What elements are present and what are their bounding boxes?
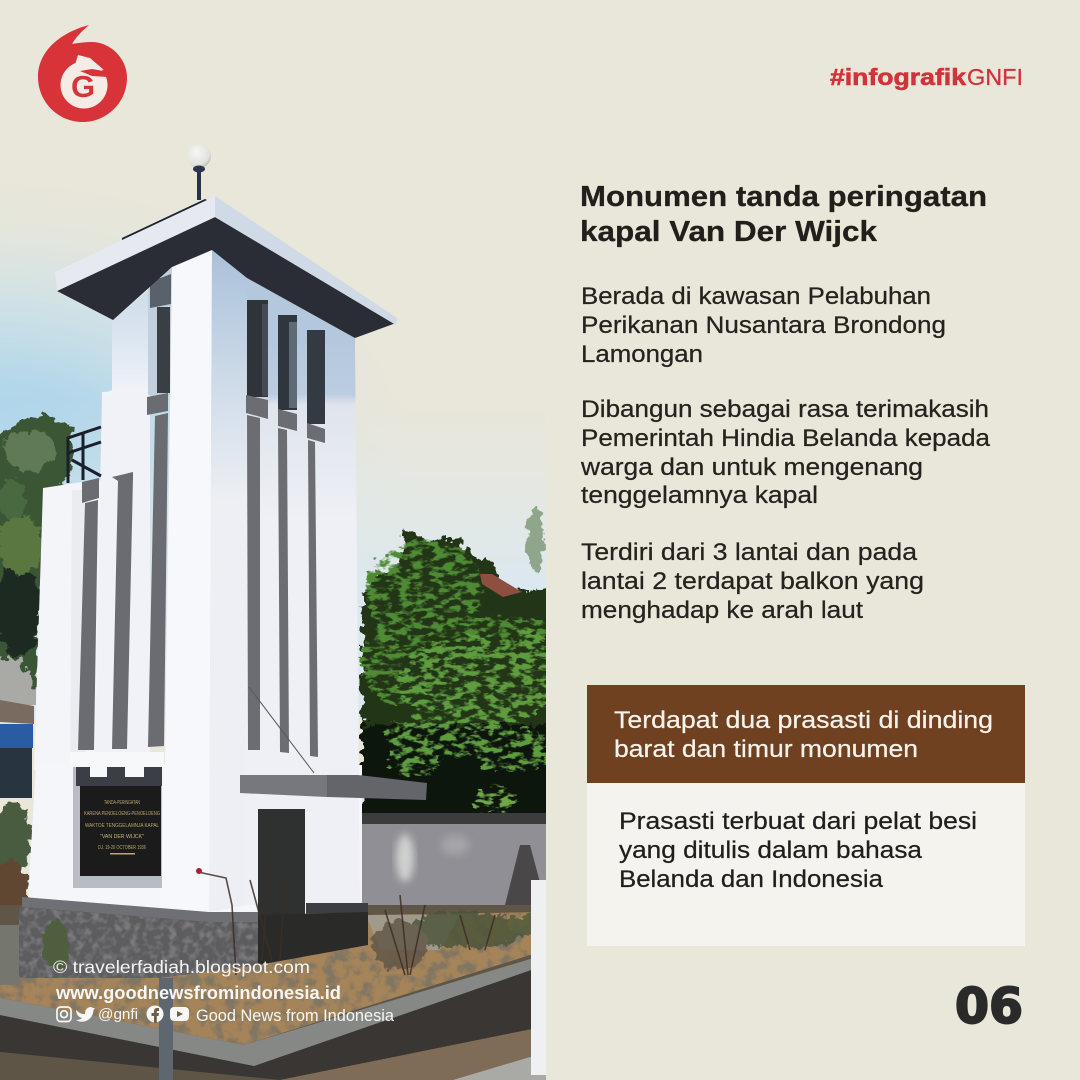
window left face (150, 274, 171, 308)
dry bushes (372, 912, 543, 969)
photo: monument tower (0, 144, 590, 1080)
heading: kapal Van Der Wijck (580, 216, 878, 248)
heading (580, 181, 987, 248)
text block: purpose: tenggelamnya kapal (581, 482, 818, 509)
sky (0, 241, 546, 720)
photo credit: © travelerfadiah.blogspot.com (53, 957, 310, 977)
white post (531, 880, 546, 1075)
central pillar left face (164, 250, 212, 765)
plaque: WAKTOE TENGGELAMNJA KAPAL (85, 823, 159, 829)
page number: 06 (955, 978, 1023, 1035)
garden wall (362, 813, 546, 905)
right wall (246, 278, 359, 765)
text block: purpose (580, 396, 991, 509)
left tree and buildings (0, 415, 72, 920)
left stripes (78, 393, 168, 750)
panel body: Belanda dan Indonesia (619, 866, 884, 893)
text block: floors: lantai 2 terdapat balkon yang (581, 568, 924, 595)
mid section (100, 392, 150, 752)
awning (240, 775, 427, 800)
awning wire (249, 687, 314, 773)
logo (38, 25, 127, 122)
small plant (43, 921, 69, 969)
icon: facebook (146, 1006, 164, 1023)
handle: @gnfi (98, 1006, 138, 1023)
text block: purpose: Pemerintah Hindia Belanda kepada (581, 425, 991, 452)
lower left block (34, 480, 104, 770)
rose (196, 868, 202, 874)
balcony railing (68, 427, 101, 483)
text block: floors (581, 539, 924, 624)
website: www.goodnewsfromindonesia.id (55, 983, 341, 1003)
dry shrubs (198, 860, 495, 975)
retaining wall and curb (0, 957, 546, 1080)
text block: purpose: warga dan untuk mengenang (580, 454, 923, 481)
page name: Good News from Indonesia (196, 1006, 395, 1025)
text block: location: Perikanan Nusantara Brondong (581, 312, 946, 339)
metal post (159, 978, 173, 1080)
hashtag: #infografik (830, 64, 966, 90)
panel body (587, 783, 1025, 946)
lamp (187, 144, 211, 200)
roof (55, 196, 397, 338)
text block: floors: menghadap ke arah laut (581, 597, 863, 624)
panel: inscription (587, 685, 1025, 946)
panel header: barat dan timur monumen (614, 736, 918, 763)
central pillar right face (210, 250, 247, 765)
plaque: DJ. 19-20 OCTOBER 1936 (98, 845, 146, 851)
plaque: "VAN DER WIJCK" (100, 834, 144, 840)
social row (57, 1006, 395, 1025)
plaque (80, 786, 161, 876)
panel body: Prasasti terbuat dari pelat besi (619, 808, 977, 835)
panel header (587, 685, 1025, 783)
recess between sections (148, 268, 172, 395)
heading: Monumen tanda peringatan (580, 181, 987, 213)
plaque: KARENA PENOELOENG-PENOELOENG (84, 811, 160, 817)
plaque: TANDA-PERINGATAN (104, 800, 140, 806)
logo: G (71, 69, 95, 104)
panel body: yang ditulis dalam bahasa (619, 837, 923, 864)
ground and grass (0, 905, 546, 1080)
tower (19, 144, 495, 978)
hashtag: GNFI (967, 64, 1023, 90)
red roof behind tree (480, 574, 522, 597)
text block: floors: Terdiri dari 3 lantai dan pada (581, 539, 918, 566)
right wall sills and stripes (246, 395, 325, 757)
icon: instagram (57, 1007, 71, 1022)
base band (22, 897, 258, 922)
lower body (28, 765, 362, 918)
text block: purpose: Dibangun sebagai rasa terimakasih (581, 396, 989, 423)
text block: location (581, 283, 946, 368)
icon: youtube (170, 1007, 189, 1021)
icon: twitter (76, 1007, 95, 1022)
white ledge and plaque recess (70, 752, 164, 888)
right wall windows (247, 300, 325, 424)
stone base (19, 907, 258, 978)
text block: location: Lamongan (581, 341, 703, 368)
upper section (108, 292, 148, 392)
door (258, 809, 305, 915)
panel header: Terdapat dua prasasti di dinding (614, 707, 993, 734)
text block: location: Berada di kawasan Pelabuhan (581, 283, 931, 310)
right tree (358, 506, 546, 813)
